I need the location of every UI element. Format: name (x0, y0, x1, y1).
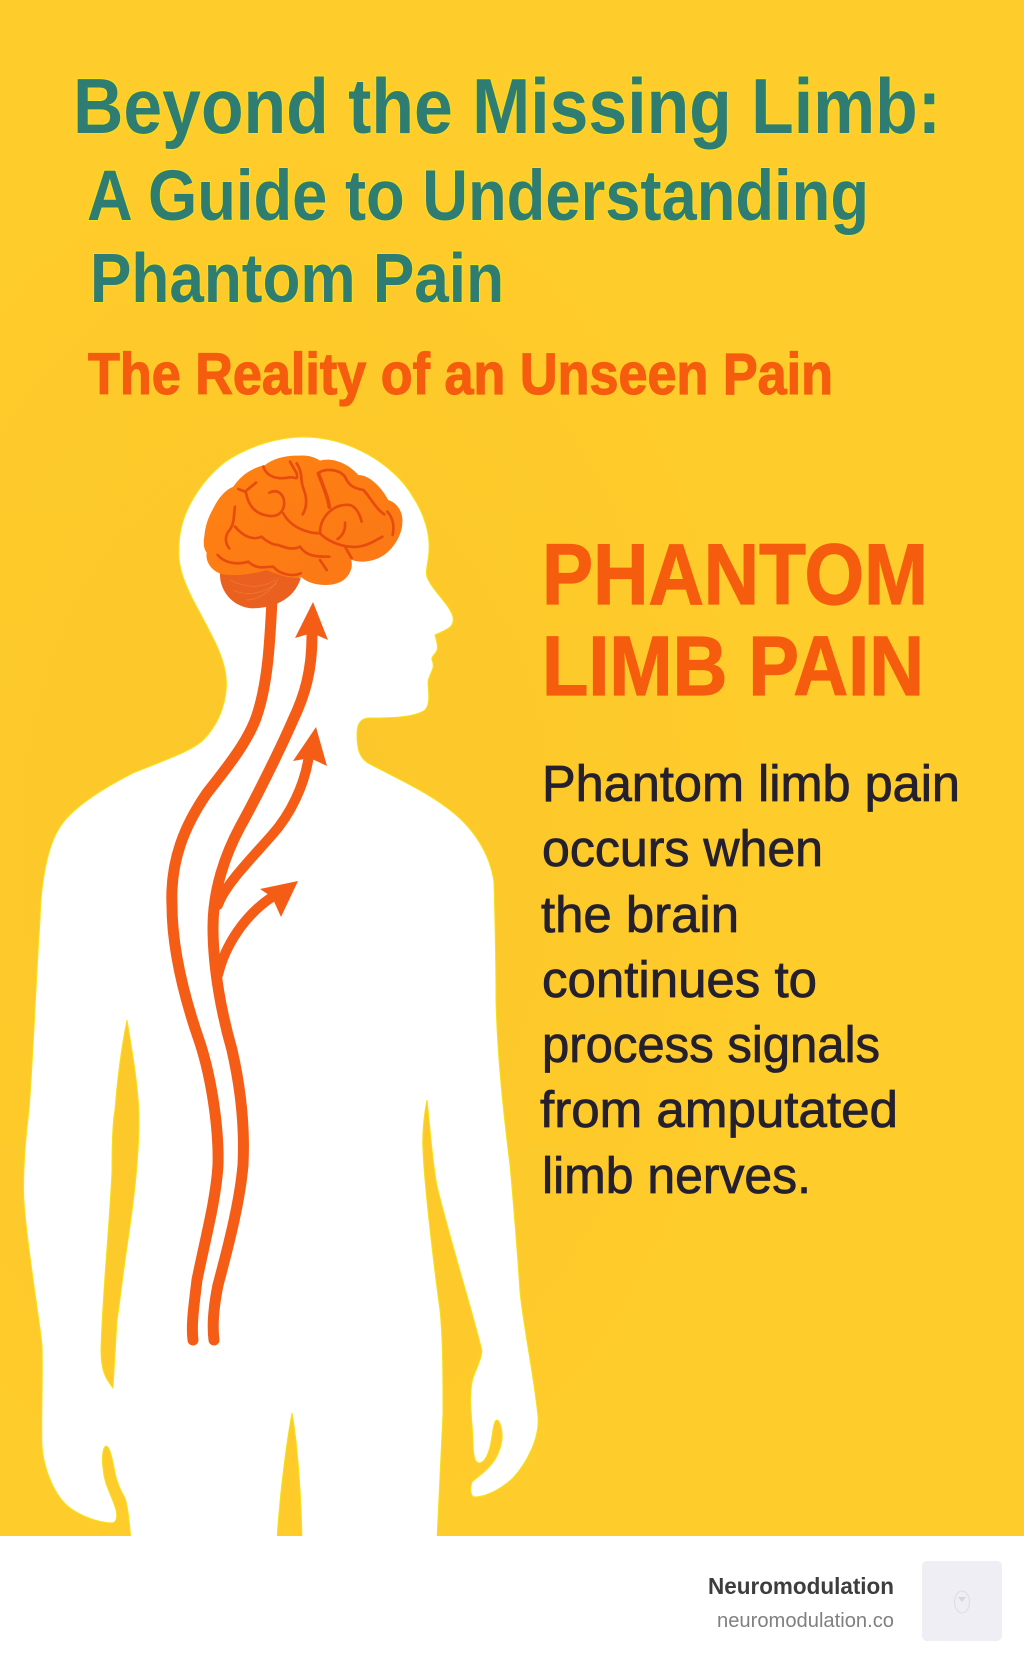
brand name: Neuromodulation (708, 1573, 894, 1599)
cerebrum (204, 456, 402, 585)
title (73, 62, 941, 317)
description text: limb nerves. (542, 1147, 811, 1204)
logo placeholder (922, 1561, 1002, 1641)
nerve pathways and arrows (172, 600, 312, 1340)
description text: process signals (542, 1016, 880, 1073)
description text: occurs when (542, 820, 823, 877)
descending nerve (172, 600, 272, 1340)
title: A Guide to Understanding (87, 157, 869, 236)
subtitle: The Reality of an Unseen Pain (88, 342, 833, 407)
title: Beyond the Missing Limb: (73, 62, 941, 150)
ascending nerve (213, 636, 312, 1340)
branch nerve lower (218, 897, 272, 975)
description text: the brain (541, 886, 739, 943)
cerebellum lines (230, 578, 278, 600)
body silhouette (24, 437, 538, 1540)
heading: phantom limb pain: PHANTOM (542, 527, 928, 623)
description text (540, 755, 960, 1204)
icon: brain (204, 456, 402, 608)
figure: human silhouette with brain and nerves (24, 437, 538, 1540)
arrowheads (260, 602, 328, 917)
footer (0, 1536, 1024, 1666)
brain folds (218, 462, 393, 575)
description text: continues to (542, 951, 817, 1008)
heading: phantom limb pain (542, 527, 928, 713)
title: Phantom Pain (90, 239, 504, 317)
brand url: neuromodulation.co (717, 1610, 894, 1632)
heading: phantom limb pain: LIMB PAIN (542, 619, 924, 713)
description text: from amputated (540, 1081, 898, 1138)
cerebellum (220, 563, 301, 608)
description text: Phantom limb pain (542, 755, 960, 812)
branch nerve upper (218, 755, 309, 905)
